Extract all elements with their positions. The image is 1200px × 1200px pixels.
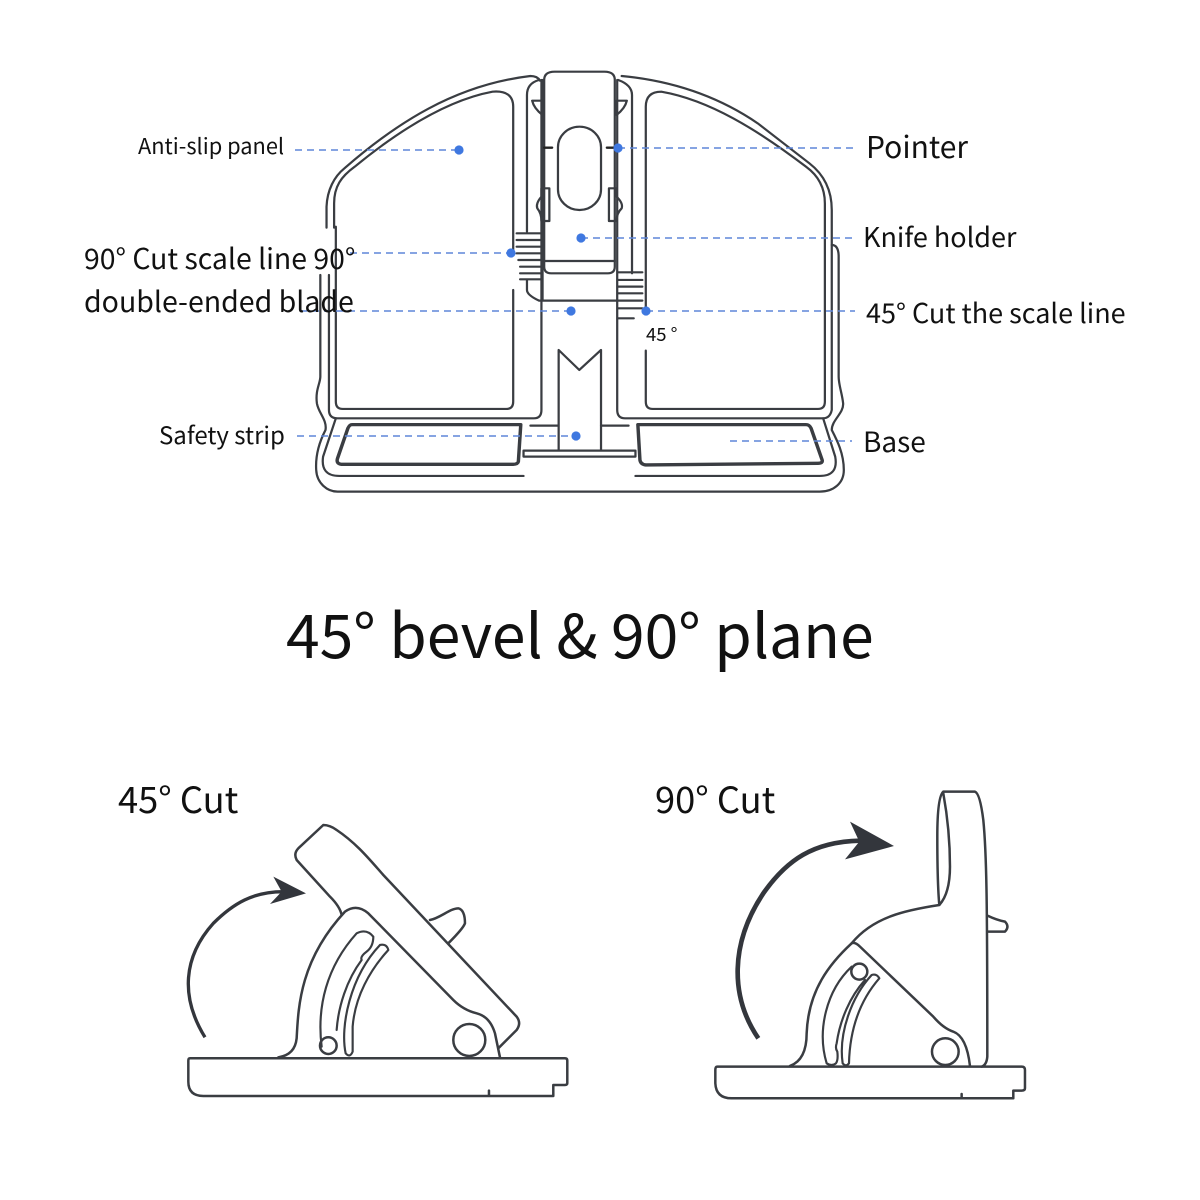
curved slots (823, 967, 879, 1065)
callout: knife holder: Knife holder (863, 216, 1017, 255)
title: 45° bevel & 90° plane (286, 589, 874, 676)
knob (988, 916, 1007, 932)
knife holder (527, 72, 632, 301)
callout: anti-slip panel: Anti-slip panel (138, 130, 284, 161)
slot pin (320, 1037, 337, 1054)
slot pin (851, 964, 867, 980)
support body (278, 908, 500, 1057)
callout: 90 degree cut scale line: 90° Cut scale line 90° (84, 237, 355, 278)
scale lines (517, 233, 642, 318)
callout: pointer: Pointer (866, 123, 968, 167)
curved slots (320, 931, 388, 1055)
callout: 45 degree cut scale line: 45° Cut the scale line (866, 292, 1126, 331)
right panel shell (617, 76, 832, 418)
45 degree small label: 45 ° (646, 321, 678, 347)
callout: double-ended blade (84, 280, 576, 321)
upright top plate (852, 792, 987, 1067)
diagram: 45 degree cut side view (188, 825, 567, 1096)
base outline (323, 418, 836, 476)
pivot wheel (453, 1024, 485, 1056)
support body (790, 943, 970, 1066)
callout: double-ended blade: double-ended blade (84, 280, 354, 321)
callout: anti-slip panel (138, 130, 464, 161)
anti-slip pads (337, 425, 822, 465)
pivot wheel (932, 1038, 959, 1065)
callout: 45 degree cut scale line (641, 292, 1126, 331)
tilted top plate (295, 825, 519, 1048)
callout: safety strip: Safety strip (159, 416, 285, 451)
knob (430, 908, 465, 943)
rotation arrow (188, 877, 306, 1037)
heading: 45 degree cut: 45° Cut (118, 772, 239, 824)
callout: pointer (613, 123, 968, 167)
left panel shell (316, 76, 844, 492)
base plate (188, 1058, 567, 1096)
top diagram: cutter front view (316, 72, 844, 492)
callout: safety strip (159, 416, 581, 451)
callout: base: Base (863, 421, 926, 461)
safety strip arrow shape (559, 350, 601, 450)
callout: knife holder (576, 216, 1017, 255)
diagram: 90 degree cut side view (715, 792, 1025, 1098)
base plate (715, 1067, 1025, 1098)
rotation arrow (738, 822, 894, 1038)
heading: 90 degree cut: 90° Cut (655, 772, 776, 824)
callout: 90 degree cut scale line (84, 237, 516, 278)
